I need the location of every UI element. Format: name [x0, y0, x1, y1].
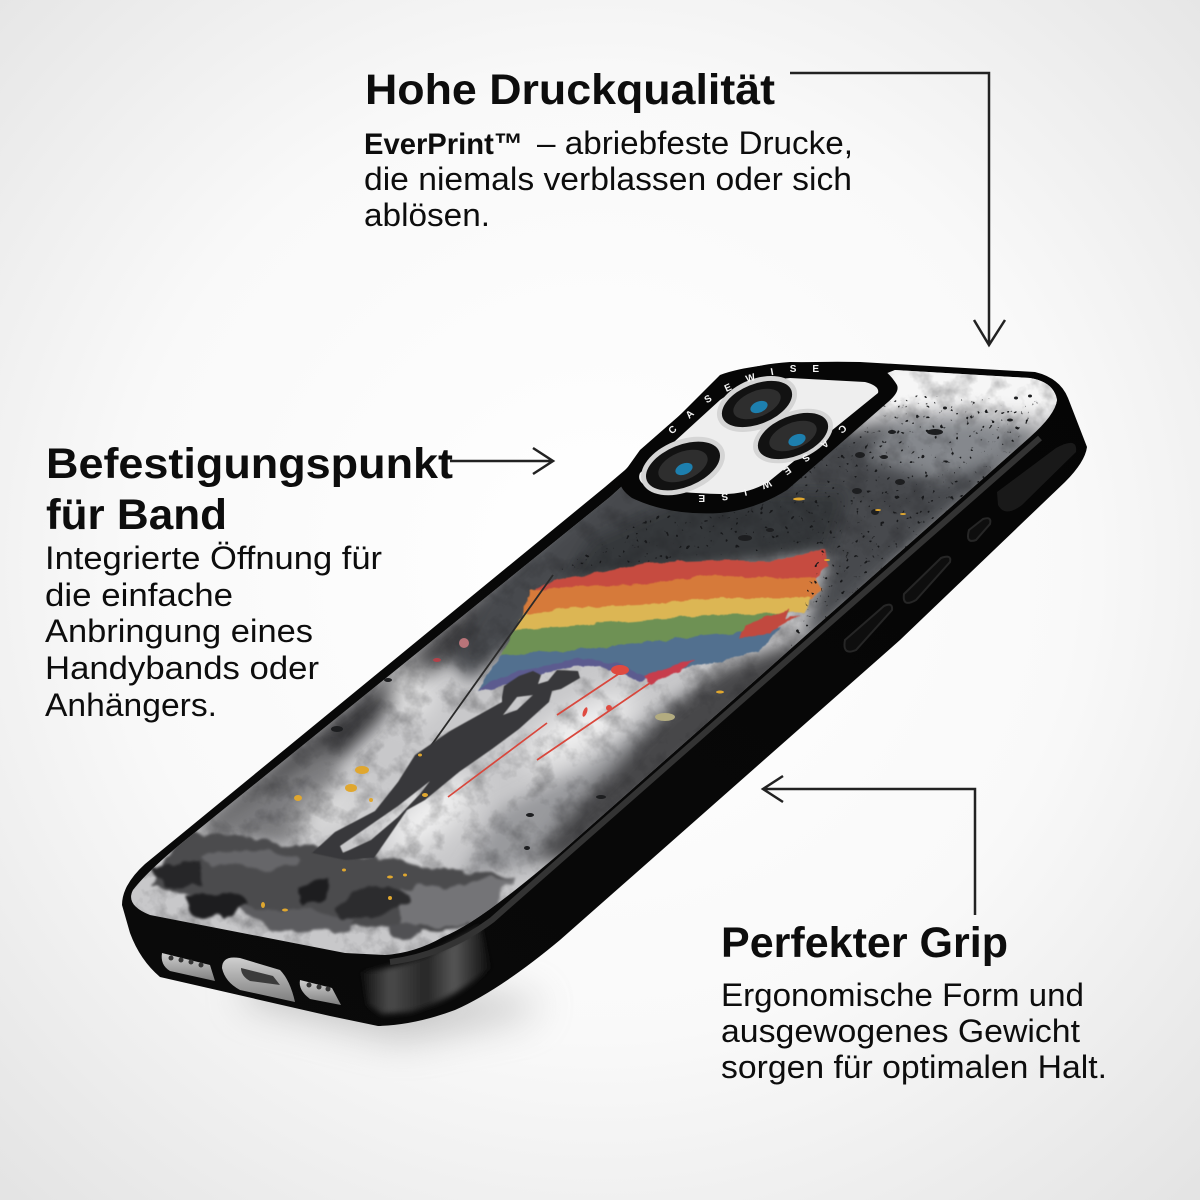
- ground: [148, 830, 515, 939]
- case body silhouette: [122, 362, 1087, 1026]
- dark speckle field: [560, 395, 1040, 650]
- heading: Perfekter Grip: [721, 919, 1008, 967]
- rainbow flag: [477, 549, 828, 692]
- description: [364, 125, 853, 233]
- heading: für Band: [46, 491, 227, 539]
- arrow: grip: [763, 776, 975, 915]
- lenses: [632, 365, 841, 507]
- description: ausgewogenes Gewicht: [721, 1013, 1080, 1049]
- camera bump: [621, 362, 898, 514]
- description: Ergonomische Form und: [721, 977, 1084, 1013]
- CASEWISE ring text: [668, 365, 846, 502]
- bottom corner highlight: [362, 925, 490, 1014]
- gold speckles: [261, 498, 906, 912]
- phone drop shadow: [240, 965, 540, 1040]
- storm clouds: [195, 420, 1040, 880]
- CASEWISE ring text: CASEWISE: [668, 365, 819, 434]
- side buttons: [844, 518, 990, 652]
- phone case: [122, 362, 1087, 1026]
- paint mottling: [136, 371, 1057, 955]
- red paint drips: [448, 673, 650, 797]
- callout: Perfekter Grip: [721, 919, 1107, 1085]
- inner glass area: [639, 378, 878, 494]
- bump frame: [620, 362, 898, 513]
- side ridge near top corner: [997, 443, 1076, 512]
- printed artwork: [131, 370, 1057, 955]
- description: sorgen für optimalen Halt.: [721, 1049, 1107, 1085]
- couple silhouette: [312, 670, 580, 860]
- callout: Befestigungspunkt: [45, 440, 453, 723]
- heading: [46, 440, 453, 539]
- description: die niemals verblassen oder sich: [364, 161, 852, 197]
- description: Anbringung eines: [45, 613, 313, 649]
- bright clouds: [290, 662, 645, 866]
- paint speckles: [331, 394, 1032, 850]
- arrow: strap attachment: [450, 448, 553, 474]
- callout: Hohe Druckqualität: [364, 66, 853, 233]
- description: Integrierte Öffnung für: [45, 540, 382, 576]
- description: Anhängers.: [45, 687, 217, 723]
- charging and speaker ports: [162, 953, 341, 1005]
- heading: Hohe Druckqualität: [365, 66, 775, 114]
- description: – abriebfeste Drucke,: [537, 125, 853, 161]
- flag pole: [428, 575, 553, 750]
- description: [45, 540, 382, 723]
- rim highlight along the long edge: [390, 438, 1040, 962]
- description: [721, 977, 1107, 1085]
- arrow: print quality: [790, 73, 1005, 345]
- description: die einfache: [45, 577, 233, 613]
- artwork base: [131, 370, 1057, 955]
- white top corner: [880, 360, 1070, 415]
- description: ablösen.: [364, 197, 490, 233]
- red paint blots: [433, 638, 629, 717]
- CASEWISE ring text: CASEWISE: [698, 426, 846, 502]
- description: EverPrint™: [364, 128, 523, 161]
- heading: Befestigungspunkt: [46, 440, 453, 488]
- description: Handybands oder: [45, 650, 319, 686]
